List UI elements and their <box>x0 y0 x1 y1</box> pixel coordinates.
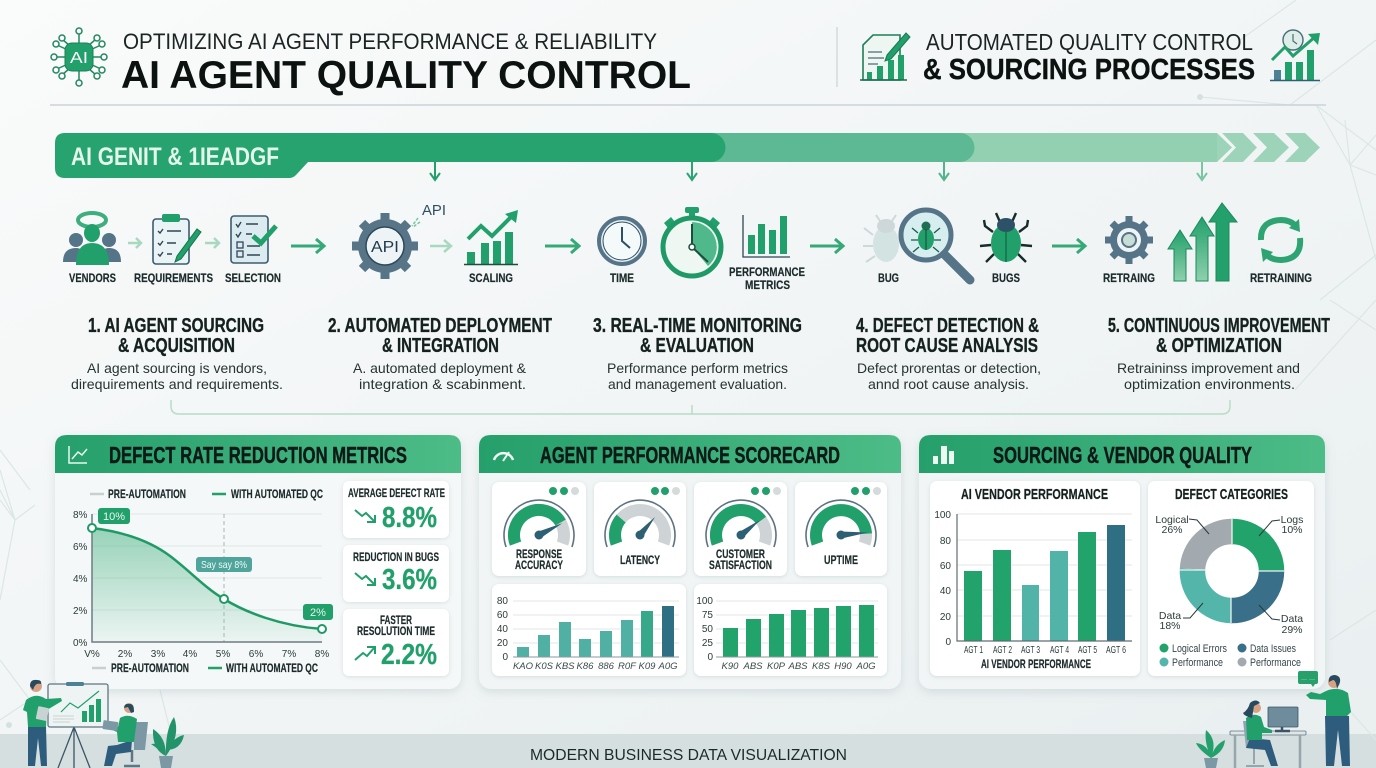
panel header: AGENT PERFORMANCE SCORECARD <box>540 442 840 468</box>
illustration: presenter with board and analyst <box>23 680 184 768</box>
panel header: SOURCING & VENDOR QUALITY <box>993 442 1252 468</box>
footer caption: MODERN BUSINESS DATA VISUALIZATION <box>530 747 847 764</box>
plant <box>151 717 184 768</box>
illustration: desk worker and colleague <box>1196 671 1351 768</box>
x axis labels: 5% <box>216 649 230 660</box>
icon: selection checklist <box>231 216 276 263</box>
bar chart: AI vendor performance: AGT 1 <box>964 645 983 656</box>
seated woman <box>1243 700 1278 766</box>
title: sourcing processes: & SOURCING PROCESSES <box>923 54 1255 86</box>
step 3 text <box>593 315 802 392</box>
bar chart: right scorecard chart: ABS <box>742 661 763 672</box>
icon: AI chip: AI <box>70 50 88 67</box>
panel header <box>479 435 901 473</box>
x axis labels <box>84 649 329 660</box>
presenter figure <box>23 680 62 766</box>
step 5 icon labels: RETRAINING <box>1250 271 1312 285</box>
bar chart: left scorecard chart: 0 <box>502 652 508 663</box>
icon: performance bars <box>743 215 790 257</box>
step 4 text: ROOT CAUSE ANALYSIS <box>856 335 1038 357</box>
bar chart: left scorecard chart: 20 <box>497 638 508 649</box>
donut labels <box>1155 514 1303 636</box>
bar chart: right scorecard chart: H90 <box>834 661 852 672</box>
bar chart: AI vendor performance: 40 <box>940 586 951 597</box>
icon: stopwatch <box>663 207 721 276</box>
bar chart: left scorecard chart: A0G <box>657 661 678 672</box>
donut legend <box>1160 643 1301 669</box>
callout: say say 8% <box>196 557 252 572</box>
step 5 icons <box>1105 203 1300 281</box>
bar chart: left scorecard chart: 40 <box>497 624 508 635</box>
callout: 10%: 10% <box>103 511 125 523</box>
gauge card: customer satisfaction: CUSTOMER <box>716 547 765 561</box>
bar chart: AI vendor performance: AGT 3 <box>1021 645 1040 656</box>
donut labels: Logical <box>1155 514 1189 526</box>
bar chart: right scorecard chart: A0G <box>855 661 876 672</box>
step 2 text: A. automated deployment & <box>353 360 527 376</box>
icon: API gear: API <box>371 239 399 256</box>
donut legend: Data Issues <box>1250 643 1296 655</box>
icon: vendors <box>63 213 121 265</box>
speech bubble <box>1298 671 1318 687</box>
y axis labels: 0% <box>73 638 88 649</box>
panel header: DEFECT RATE REDUCTION METRICS <box>109 442 407 468</box>
step 1 text <box>71 315 283 392</box>
bar chart: left scorecard chart: K86 <box>577 661 594 672</box>
standing man <box>1306 675 1351 766</box>
donut legend: Performance <box>1172 657 1223 669</box>
step 4 text: annd root cause analysis. <box>868 376 1029 392</box>
title: subtitle line: OPTIMIZING AI AGENT PERFORMANCE & RELIABILITY <box>123 29 657 54</box>
gauge card: response accuracy: RESPONSE <box>516 547 562 561</box>
desk with monitor <box>1230 707 1306 768</box>
stat card: faster resolution time: 2.2% <box>381 639 437 671</box>
step 1 icon labels <box>69 271 281 285</box>
header: left title block <box>51 28 691 97</box>
gauge card: uptime <box>795 482 887 576</box>
arrow: step 3 to 4 <box>810 239 843 253</box>
step 4 text <box>856 315 1041 392</box>
bar chart: AI vendor performance: 80 <box>940 536 951 547</box>
step 3 text: & EVALUATION <box>640 335 754 357</box>
icon: AI chip <box>51 28 107 86</box>
step 5 text <box>1108 315 1330 392</box>
step 5 text: Retraininss improvement and <box>1117 360 1300 376</box>
stat card: faster resolution time: RESOLUTION TIME <box>357 624 435 638</box>
title: automated quality control: AUTOMATED QUALITY CONTROL <box>926 29 1253 55</box>
bar chart: left scorecard chart: 80 <box>497 596 508 607</box>
donut legend: Logical Errors <box>1172 643 1227 655</box>
step 2 text: & INTEGRATION <box>382 335 499 357</box>
step 4 icon labels: BUG <box>878 271 899 285</box>
step 4 icon labels <box>878 271 1020 285</box>
step 5 text: & OPTIMIZATION <box>1156 335 1282 357</box>
bar chart: AI vendor performance: AGT 6 <box>1106 645 1126 656</box>
bar chart: right scorecard chart: K0P <box>767 661 786 672</box>
speech bubble: ... ... <box>1301 676 1315 682</box>
panel: sourcing and vendor quality <box>919 435 1325 689</box>
icon: document with pen and bars <box>860 33 910 80</box>
arrow <box>430 240 451 252</box>
bar chart: right scorecard chart: 25 <box>702 638 713 649</box>
donut chart: defect categories: DEFECT CATEGORIES <box>1175 486 1288 503</box>
x axis labels: V% <box>84 649 100 660</box>
bar chart: right scorecard chart: K8S <box>812 661 831 672</box>
donut labels: Data <box>1281 613 1303 625</box>
stat card: faster resolution time <box>343 609 449 676</box>
bar chart: left scorecard chart: 60 <box>497 610 508 621</box>
step 1 icon labels: SELECTION <box>225 271 281 285</box>
icon: refresh loop <box>1261 219 1300 262</box>
step 2 text <box>328 315 552 392</box>
process ribbon <box>55 133 1320 178</box>
top legend <box>90 487 323 501</box>
stat card: average defect rate <box>343 481 449 538</box>
bar chart: AI vendor performance: 60 <box>940 561 951 572</box>
bar chart: AI vendor performance: 0 <box>945 637 951 648</box>
step 3 text: and management evaluation. <box>608 376 787 392</box>
y axis labels: 8% <box>73 510 88 521</box>
gauge card: customer satisfaction <box>694 482 787 576</box>
bar chart: AI vendor performance: AI VENDOR PERFORMANCE <box>981 657 1091 671</box>
icon: scaling chart <box>464 210 518 264</box>
icon: faded bug <box>863 215 899 262</box>
step 3 text: Performance perform metrics <box>607 360 788 376</box>
bar chart: right scorecard chart: 0 <box>707 652 713 663</box>
top legend: WITH AUTOMATED QC <box>231 487 323 501</box>
x axis labels: 7% <box>282 649 296 660</box>
bar chart: right scorecard chart: 50 <box>702 624 713 635</box>
gauge card: uptime: UPTIME <box>824 553 858 567</box>
bottom legend: PRE-AUTOMATION <box>111 661 189 675</box>
arrow <box>128 238 141 248</box>
icon: requirements clipboard <box>153 214 201 264</box>
gauge card: latency <box>594 482 686 576</box>
step 3 icon labels <box>610 265 805 292</box>
y axis labels: 2% <box>73 606 88 617</box>
step 1 icons <box>63 213 276 265</box>
bar chart: left scorecard chart <box>492 584 686 676</box>
step 4 icon labels: BUGS <box>992 271 1020 285</box>
gauge card: latency: LATENCY <box>620 553 660 567</box>
leader lines <box>1183 519 1280 620</box>
label: API: API <box>422 202 446 219</box>
easel and board <box>48 682 108 768</box>
donut labels: 29% <box>1281 624 1303 636</box>
donut legend: Performance <box>1250 657 1301 669</box>
bar chart: right scorecard chart: 100 <box>696 596 713 607</box>
x axis labels: 4% <box>183 649 197 660</box>
step 4 text: Defect prorentas or detection, <box>857 360 1041 376</box>
stat card: average defect rate: 8.8% <box>382 502 437 534</box>
icon: clock <box>599 218 645 264</box>
callout: 10% <box>98 508 130 524</box>
step 1 text: & ACQUISITION <box>118 335 235 357</box>
arrow <box>205 238 219 248</box>
bar chart: AI vendor performance: 20 <box>940 612 951 623</box>
step 1 text: 1. AI AGENT SOURCING <box>88 315 264 337</box>
donut labels: 10% <box>1281 524 1303 536</box>
stat card: reduction in bugs: REDUCTION IN BUGS <box>353 550 439 564</box>
x axis labels: 8% <box>315 649 329 660</box>
donut labels: Data <box>1159 610 1181 622</box>
step 1 icon labels: VENDORS <box>69 271 116 285</box>
step 3 text: 3. REAL-TIME MONITORING <box>593 315 802 337</box>
stat card: reduction in bugs: 3.6% <box>382 564 437 596</box>
step 4 icons <box>863 210 1032 280</box>
ribbon chevrons <box>1170 133 1320 162</box>
icon: retraining gear <box>1105 216 1153 264</box>
panel header <box>919 435 1325 473</box>
ribbon label: AI GENIT & 1IEADGF <box>71 143 279 171</box>
arrow: step 2 to 3 <box>545 239 579 253</box>
y axis labels <box>73 510 88 649</box>
bar chart: AI vendor performance: AGT 5 <box>1078 645 1097 656</box>
step 2 text: integration & scabinment. <box>359 376 526 392</box>
bar chart: right scorecard chart <box>694 584 887 676</box>
panel: agent performance scorecard <box>479 435 901 689</box>
label: scaling: SCALING <box>469 271 513 285</box>
arrows: ribbon down to steps <box>430 162 1207 180</box>
bottom legend: WITH AUTOMATED QC <box>226 661 318 675</box>
step 4 text: 4. DEFECT DETECTION & <box>856 315 1039 337</box>
bottom legend <box>92 661 318 675</box>
step 2 text: 2. AUTOMATED DEPLOYMENT <box>328 315 552 337</box>
bar chart: AI vendor performance: AI VENDOR PERFORMANCE <box>961 486 1108 503</box>
bar chart: right scorecard chart: 75 <box>702 610 713 621</box>
panel header <box>55 435 461 473</box>
panel: defect rate reduction metrics <box>55 435 461 689</box>
stat card: average defect rate: AVERAGE DEFECT RATE <box>348 486 445 500</box>
step 1 icon labels: REQUIREMENTS <box>134 271 213 285</box>
y axis labels: 6% <box>73 542 88 553</box>
bar chart: AI vendor performance <box>930 481 1140 676</box>
icon: rising arrows <box>1168 203 1237 281</box>
step 2 icons <box>352 202 518 279</box>
donut labels: 18% <box>1159 620 1181 632</box>
header: right title block <box>837 27 1320 87</box>
bar chart: right scorecard chart: ABS <box>787 661 808 672</box>
bar chart: left scorecard chart: R0F <box>618 661 637 672</box>
y axis labels: 4% <box>73 574 88 585</box>
step 3 icon labels: TIME <box>610 271 634 285</box>
gauge card: response accuracy: ACCURACY <box>515 558 563 572</box>
icon: API gear <box>352 213 418 279</box>
gauge card: response accuracy <box>492 482 586 576</box>
step 3 icon labels: PERFORMANCE <box>729 265 805 279</box>
line chart: defect rate <box>73 508 333 660</box>
bar chart: AI vendor performance: AGT 2 <box>993 645 1012 656</box>
bar chart: left scorecard chart: K09 <box>639 661 656 672</box>
icon: clock and growth chart <box>1270 30 1320 80</box>
icon: magnifier with bug <box>901 210 970 280</box>
bar chart: AI vendor performance: AGT 4 <box>1050 645 1069 656</box>
x axis labels: 6% <box>249 649 263 660</box>
bar chart: AI vendor performance: 100 <box>934 510 951 521</box>
step 1 text: direquirements and requirements. <box>71 376 283 392</box>
step 3 icons <box>599 207 790 276</box>
stat card: reduction in bugs <box>343 545 449 602</box>
seated analyst <box>102 703 148 766</box>
step 5 text: optimization environments. <box>1124 376 1295 392</box>
donut chart: defect categories <box>1148 481 1314 676</box>
x axis labels: 2% <box>118 649 132 660</box>
stat card: faster resolution time: FASTER <box>380 613 412 627</box>
bar chart: left scorecard chart: KBS <box>555 661 575 672</box>
step 5 icon labels: RETRAING <box>1103 271 1155 285</box>
step 5 icon labels <box>1103 271 1312 285</box>
bar chart: left scorecard chart: K0S <box>535 661 554 672</box>
icon: beetle <box>980 213 1032 262</box>
arrow: step 4 to 5 <box>1052 239 1085 253</box>
callout: 2% <box>303 604 333 620</box>
donut labels: 26% <box>1161 524 1183 536</box>
gauge card: customer satisfaction: SATISFACTION <box>709 558 772 572</box>
title: main heading: AI AGENT QUALITY CONTROL <box>121 54 691 97</box>
callout: 2%: 2% <box>310 607 326 619</box>
step 1 text: AI agent sourcing is vendors, <box>87 360 267 376</box>
x axis labels: 3% <box>151 649 165 660</box>
plant <box>1196 730 1225 768</box>
bar chart: right scorecard chart: K90 <box>722 661 739 672</box>
bar chart: left scorecard chart: KAO <box>513 661 534 672</box>
top legend: PRE-AUTOMATION <box>108 487 186 501</box>
bar chart: left scorecard chart: 886 <box>598 661 615 672</box>
step 3 icon labels: METRICS <box>745 278 790 292</box>
arrow: step 1 to 2 <box>291 239 324 253</box>
donut labels: Logs <box>1281 514 1303 526</box>
callout: say say 8%: Say say 8% <box>201 559 247 571</box>
